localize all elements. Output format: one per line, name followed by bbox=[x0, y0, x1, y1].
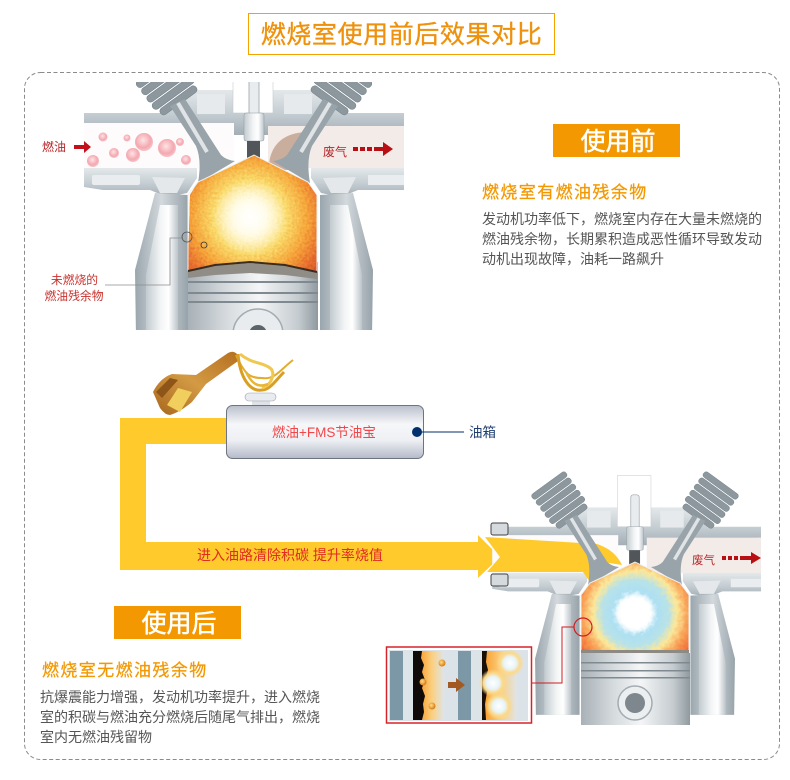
badge: before use: 使用前 bbox=[580, 128, 656, 156]
body: after use: 抗爆震能力增强，发动机功率提升，进入燃烧 bbox=[40, 689, 320, 705]
label: exhaust bbox=[323, 142, 393, 159]
label: exhaust: 废气 bbox=[692, 553, 715, 567]
body: before use: 动机出现故障，油耗一路飙升 bbox=[482, 251, 664, 267]
arrow bbox=[448, 678, 465, 692]
tank cap bbox=[245, 393, 276, 406]
body: after use bbox=[40, 689, 320, 745]
title: 燃烧室使用前后效果对比 bbox=[261, 21, 542, 49]
chamber outline bbox=[188, 155, 317, 272]
body: after use: 室内无燃油残留物 bbox=[40, 729, 152, 745]
body: after use: 室的积碳与燃油充分燃烧后随尾气排出，燃烧 bbox=[40, 709, 320, 725]
fuel pipe arrow bbox=[120, 418, 500, 578]
label: exhaust bbox=[692, 552, 761, 567]
piston bbox=[188, 262, 318, 330]
text block: after use bbox=[40, 661, 320, 745]
label: exhaust: 废气 bbox=[323, 144, 347, 159]
inset: carbon cleaning comparison bbox=[386, 647, 532, 723]
after strip bbox=[458, 649, 524, 720]
before strip bbox=[390, 651, 446, 720]
text block: before use bbox=[482, 183, 762, 267]
callout line and circle bbox=[531, 618, 592, 683]
bolts bbox=[491, 523, 508, 586]
callout: unburned residue bbox=[44, 232, 207, 303]
callout: unburned residue: 未燃烧的 bbox=[51, 273, 98, 287]
body: before use bbox=[482, 211, 762, 267]
piston bbox=[581, 653, 690, 725]
callout: unburned residue: 燃油残余物 bbox=[44, 289, 104, 303]
title bbox=[248, 14, 554, 54]
label: fuel in: 燃油 bbox=[42, 139, 66, 154]
exhaust smudge bbox=[269, 132, 302, 170]
callout: tank label: 油箱 bbox=[469, 425, 496, 440]
yellow intake flow bbox=[485, 537, 622, 582]
engine diagram: before use bbox=[42, 82, 404, 330]
engine diagram: after use bbox=[485, 471, 761, 725]
combustion chamber fire bbox=[188, 156, 316, 271]
badge: after use: 使用后 bbox=[141, 610, 217, 638]
callout: tank label bbox=[412, 425, 496, 440]
badge: before use bbox=[553, 124, 680, 157]
label: fuel in bbox=[42, 139, 91, 154]
fuel tank: 燃油+FMS节油宝 bbox=[272, 424, 376, 440]
body: before use: 发动机功率低下，燃烧室内存在大量未燃烧的 bbox=[482, 211, 762, 227]
icon: additive bottle pouring bbox=[153, 352, 293, 415]
heading: before use: 燃烧室有燃油残余物 bbox=[482, 183, 648, 202]
fuel tank bbox=[226, 393, 424, 458]
heading: after use: 燃烧室无燃油残余物 bbox=[42, 661, 208, 680]
body: before use: 燃油残余物，长期累积造成恶性循环导致发动 bbox=[482, 231, 762, 247]
combustion chamber clean burn bbox=[580, 562, 690, 653]
badge: after use bbox=[114, 606, 241, 639]
fuel bubbles bbox=[87, 132, 191, 167]
label: pipe text: 进入油路清除积碳 提升率烧值 bbox=[197, 547, 383, 563]
